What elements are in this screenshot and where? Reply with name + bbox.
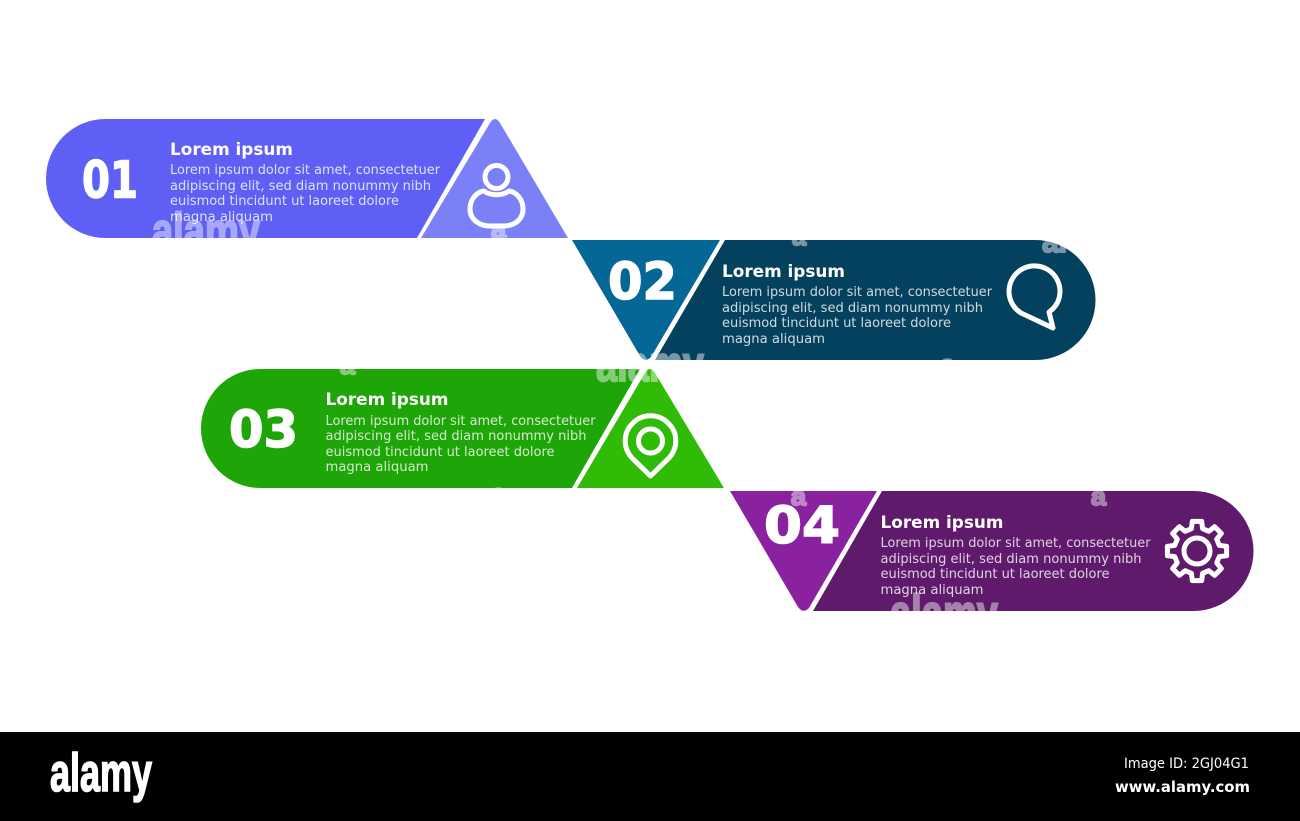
image id: Image ID: 2GJ04G1 [1124,756,1249,772]
watermarks: alamy [152,203,260,259]
text block: step 04: magna aliquam [880,583,984,598]
icon: speech bubble [1009,266,1060,328]
footer band [0,732,1300,821]
text block: step 03: Lorem ipsum dolor sit amet, consectetuer [326,414,596,429]
website: www.alamy.com [1115,778,1250,796]
text block: step 01 [170,163,441,225]
text block: step 01: magna aliquam [170,210,273,225]
text block: step 03 [326,414,596,475]
number: 04: 04 [764,497,840,556]
banner: step 01 body [46,119,485,238]
heading: step 04: Lorem ipsum [880,513,1004,533]
number: 02: 02 [608,253,677,312]
watermarks [152,203,1107,641]
triangle: step 02 accent [572,240,720,360]
banner: step 03 body [201,369,640,488]
text block: step 02: magna aliquam [722,332,825,347]
triangle: step 04 accent [730,491,877,611]
triangle: step 01 accent [421,119,568,238]
text block: step 02: Lorem ipsum dolor sit amet, consectetuer [722,285,993,300]
watermarks: al [1042,223,1067,259]
text block: step 04: adipiscing elit, sed diam nonummy nibh [880,552,1142,567]
icon: person [470,166,523,226]
banner: step 04 body [813,491,1254,611]
watermarks: a [940,349,956,379]
watermarks: a [491,478,507,508]
panel: step 01 [46,119,568,238]
icon: map pin [625,416,676,476]
text block: step 01: Lorem ipsum dolor sit amet, consectetuer [170,163,441,178]
text block: step 02: euismod tincidunt ut laoreet dolore [722,316,951,331]
text block: step 03: euismod tincidunt ut laoreet dolore [326,445,554,460]
number: 03: 03 [229,401,298,460]
text block: step 01: adipiscing elit, sed diam nonummy nibh [170,179,431,194]
heading: step 02: Lorem ipsum [722,262,845,282]
text block: step 01: euismod tincidunt ut laoreet dolore [170,194,399,209]
text block: step 04: Lorem ipsum dolor sit amet, consectetuer [880,536,1151,551]
icon: gear [1167,521,1227,581]
watermarks: a [491,214,507,244]
number: 01: 01 [82,152,138,210]
panel: step 02 [572,240,1096,360]
text block: step 02: adipiscing elit, sed diam nonummy nibh [722,301,983,316]
watermarks: alamy [596,336,704,392]
text block: step 03: magna aliquam [326,460,428,475]
watermarks: a [791,481,807,511]
triangle: step 03 accent [577,369,724,488]
panel: step 04 [730,491,1254,611]
heading: step 01: Lorem ipsum [170,140,293,160]
watermarks: alamy [890,585,998,641]
heading: step 03: Lorem ipsum [326,390,448,410]
watermarks: a [792,221,807,251]
text block: step 04 [880,536,1151,598]
panel: step 03 [201,369,724,488]
banner: step 02 body [655,240,1096,360]
logo: alamy: alamy [50,743,152,803]
watermarks: a [1091,481,1107,511]
text block: step 02 [722,285,993,347]
text block: step 03: adipiscing elit, sed diam nonummy nibh [326,429,586,444]
watermarks: a [340,350,356,380]
text block: step 04: euismod tincidunt ut laoreet dolore [880,567,1110,582]
